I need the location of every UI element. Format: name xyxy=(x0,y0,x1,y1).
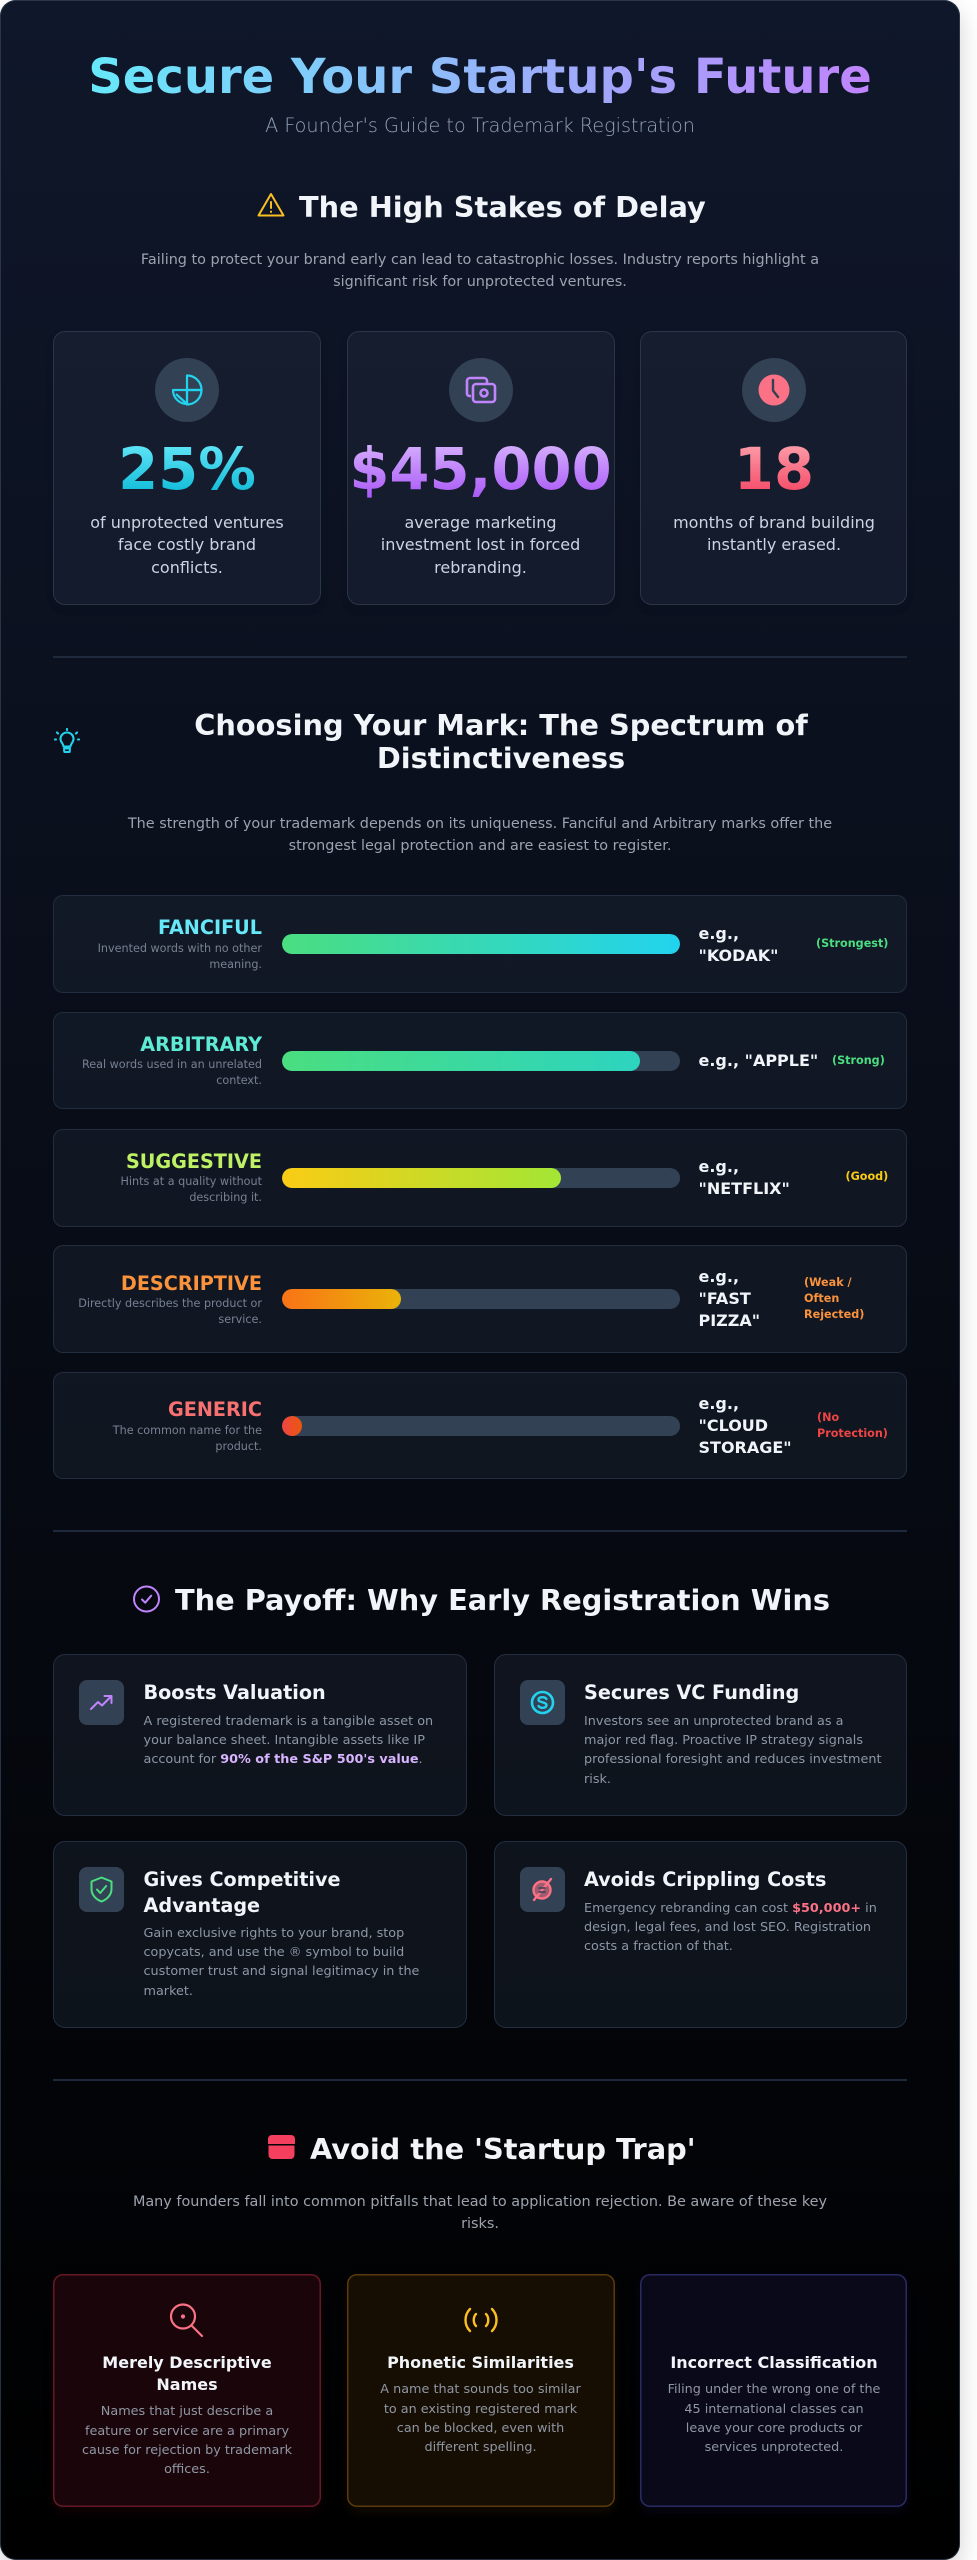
description xyxy=(121,1175,262,1204)
card text: can be blocked, even with xyxy=(397,2421,564,2436)
card text xyxy=(144,1714,433,1767)
stat label: rebranding. xyxy=(434,558,527,577)
card title: Names xyxy=(156,2375,218,2394)
heading text: Avoid the 'Startup Trap' xyxy=(310,2132,696,2166)
card title xyxy=(102,2352,272,2394)
description: meaning. xyxy=(209,958,262,971)
section heading: spectrum xyxy=(54,708,808,774)
card title: Phonetic Similarities xyxy=(387,2352,574,2372)
example: e.g., "APPLE" xyxy=(698,1051,818,1070)
card text xyxy=(82,2404,292,2477)
strength note: Rejected) xyxy=(804,1308,864,1321)
icon: shield check xyxy=(79,1867,124,1912)
trap paragraph xyxy=(133,2194,827,2232)
icon: sound waves xyxy=(464,2308,498,2332)
example: e.g., xyxy=(698,1157,739,1176)
strength bar xyxy=(282,1168,680,1188)
card text: customer trust and signal legitimacy in the xyxy=(144,1964,419,1979)
example xyxy=(698,924,779,965)
icon: trap xyxy=(268,2135,295,2159)
card title xyxy=(144,1868,340,1917)
panel: suggestive row xyxy=(53,1129,907,1227)
panel: descriptive row xyxy=(53,1245,907,1353)
label: ARBITRARY xyxy=(140,1033,262,1056)
strength bar xyxy=(282,1289,680,1309)
stat number: 25% xyxy=(118,436,256,503)
card text: different spelling. xyxy=(424,2440,537,2455)
strength note: Protection) xyxy=(817,1427,888,1440)
example xyxy=(698,1267,760,1330)
card text: services unprotected. xyxy=(705,2440,843,2455)
strength note: (Strongest) xyxy=(816,937,888,950)
icon: check circle xyxy=(133,1586,160,1612)
icon: light bulb xyxy=(54,728,80,753)
card text: 45 international classes can xyxy=(684,2402,864,2417)
section heading: payoff xyxy=(133,1583,830,1617)
card text: offices. xyxy=(164,2462,210,2477)
card text: Investors see an unprotected brand as a xyxy=(584,1714,843,1729)
description: product. xyxy=(215,1440,262,1453)
strength bar xyxy=(282,1416,680,1436)
strength note: Often xyxy=(804,1292,839,1305)
section heading: startup trap xyxy=(268,2132,696,2166)
icon: dollar coin xyxy=(520,1680,564,1725)
card text: account for 90% of the S&P 500's value. xyxy=(144,1752,423,1767)
card title: Advantage xyxy=(144,1894,260,1917)
card title: Avoids Crippling Costs xyxy=(584,1868,826,1891)
panel: incorrect classification xyxy=(640,2274,907,2507)
card text xyxy=(584,1714,882,1787)
subtitle: A Founder's Guide to Trademark Registration xyxy=(265,114,695,137)
example: e.g., xyxy=(698,924,739,943)
panel: stat 18 xyxy=(640,331,907,605)
description: service. xyxy=(218,1313,262,1326)
stat label: average marketing xyxy=(404,513,557,532)
card text xyxy=(380,2382,581,2455)
stat label: conflicts. xyxy=(151,558,223,577)
heading text: Choosing Your Mark: The Spectrum of xyxy=(194,708,808,742)
description xyxy=(78,1297,262,1326)
panel: merely descriptive xyxy=(53,2274,321,2507)
card text: copycats, and use the ® symbol to build xyxy=(144,1945,404,1960)
icon: list lines xyxy=(760,2308,789,2332)
stat label: instantly erased. xyxy=(707,535,841,554)
icon: pie chart xyxy=(155,358,219,422)
stat label: of unprotected ventures xyxy=(90,513,284,532)
stat number: 18 xyxy=(734,436,814,503)
example: e.g., xyxy=(698,1394,739,1413)
description xyxy=(82,1058,262,1087)
strength note: (Strong) xyxy=(832,1054,885,1067)
spectrum paragraph: The strength of your trademark depends on its uniqueness. Fanciful and Arbitrary marks offer the xyxy=(128,816,832,832)
stat label: months of brand building xyxy=(673,513,875,532)
stat label xyxy=(381,513,580,577)
panel: avoids crippling costs xyxy=(494,1841,907,2028)
description: describing it. xyxy=(189,1191,262,1204)
panel: fanciful row xyxy=(53,895,907,993)
example: "CLOUD xyxy=(698,1416,768,1435)
label: DESCRIPTIVE xyxy=(121,1272,262,1295)
label: FANCIFUL xyxy=(158,916,262,939)
example xyxy=(698,1157,790,1198)
card text: A registered trademark is a tangible asset on xyxy=(144,1714,433,1729)
card text: market. xyxy=(144,1984,193,1999)
card title: Secures VC Funding xyxy=(584,1681,799,1704)
icon: money xyxy=(448,358,512,422)
card text: leave your core products or xyxy=(686,2421,862,2436)
card text: A name that sounds too similar xyxy=(380,2382,581,2397)
icon: trending up xyxy=(79,1680,124,1725)
title: Secure Your Startup's Future xyxy=(88,49,872,105)
card text: risk. xyxy=(584,1772,611,1787)
card title: Boosts Valuation xyxy=(144,1681,326,1704)
description: The common name for the xyxy=(113,1424,262,1437)
example: "KODAK" xyxy=(698,946,779,965)
stat label xyxy=(673,513,875,554)
heading text: The Payoff: Why Early Registration Wins xyxy=(175,1583,830,1617)
panel: generic row xyxy=(53,1372,907,1479)
panel: stat 25% xyxy=(53,331,321,605)
icon: magnifier xyxy=(170,2303,204,2337)
description xyxy=(98,942,262,971)
card text: major red flag. Proactive IP strategy signals xyxy=(584,1733,863,1748)
card text: Filing under the wrong one of the xyxy=(668,2382,880,2397)
heading text: Distinctiveness xyxy=(377,740,625,774)
card text xyxy=(640,2380,908,2457)
stat label: face costly brand xyxy=(118,535,256,554)
strength note xyxy=(804,1276,864,1321)
intro paragraph xyxy=(141,252,819,290)
trap paragraph: Many founders fall into common pitfalls that lead to application rejection. Be aware of these key xyxy=(133,2194,827,2210)
heading text xyxy=(194,708,808,774)
example: PIZZA" xyxy=(698,1311,760,1330)
card text: cause for rejection by trademark xyxy=(82,2443,292,2458)
intro paragraph: significant risk for unprotected ventures. xyxy=(333,274,627,290)
label: GENERIC xyxy=(168,1398,262,1421)
description: Directly describes the product or xyxy=(78,1297,262,1310)
example: "FAST xyxy=(698,1289,751,1308)
example: e.g., xyxy=(698,1267,739,1286)
panel: secures vc funding xyxy=(494,1654,907,1816)
trap paragraph: risks. xyxy=(461,2216,499,2232)
section heading: high stakes xyxy=(258,190,706,224)
panel: phonetic similarities xyxy=(346,2274,614,2507)
stat label xyxy=(90,513,284,577)
card title: Merely Descriptive xyxy=(102,2352,272,2372)
card title: Incorrect Classification xyxy=(670,2352,878,2372)
icon: clock xyxy=(742,358,806,422)
example xyxy=(698,1394,792,1457)
example: "NETFLIX" xyxy=(698,1179,790,1198)
card text: feature or service are a primary xyxy=(85,2424,289,2439)
card text: professional foresight and reduces investment xyxy=(584,1752,881,1767)
description: Hints at a quality without xyxy=(121,1175,262,1188)
card text: Names that just describe a xyxy=(101,2404,273,2419)
panel: arbitrary row xyxy=(53,1012,907,1109)
card text: costs a fraction of that. xyxy=(584,1939,733,1954)
strength note: (Weak / xyxy=(804,1276,852,1289)
panel: boosts valuation xyxy=(53,1654,467,1816)
card text: your balance sheet. Intangible assets like IP xyxy=(144,1733,425,1748)
strength bar xyxy=(282,934,680,954)
intro paragraph: Failing to protect your brand early can lead to catastrophic losses. Industry reports highlight a xyxy=(141,252,819,268)
example: STORAGE" xyxy=(698,1438,792,1457)
icon: crossed dollar xyxy=(520,1867,564,1912)
description: context. xyxy=(216,1074,262,1087)
icon: warning triangle xyxy=(258,193,284,216)
label: SUGGESTIVE xyxy=(126,1150,262,1173)
card text: Gain exclusive rights to your brand, stop xyxy=(144,1926,404,1941)
description xyxy=(112,1424,262,1453)
card title: Gives Competitive xyxy=(144,1868,340,1891)
description: Invented words with no other xyxy=(98,942,262,955)
description: Real words used in an unrelated xyxy=(82,1058,262,1071)
panel: stat $45,000 xyxy=(346,331,614,605)
heading text: The High Stakes of Delay xyxy=(299,190,706,224)
spectrum paragraph: strongest legal protection and are easiest to register. xyxy=(289,838,671,854)
card text xyxy=(584,1901,877,1954)
strength note: (No xyxy=(817,1411,839,1424)
strength note xyxy=(817,1411,888,1440)
panel: competitive advantage xyxy=(53,1841,467,2028)
card text: to an existing registered mark xyxy=(384,2402,577,2417)
card text: design, legal fees, and lost SEO. Registration xyxy=(584,1920,871,1935)
strength note: (Good) xyxy=(846,1170,888,1183)
card text: Emergency rebranding can cost $50,000+ in xyxy=(584,1901,877,1916)
strength bar xyxy=(282,1051,680,1071)
stat label: investment lost in forced xyxy=(381,535,580,554)
stat number: $45,000 xyxy=(349,436,612,503)
card text xyxy=(144,1926,419,1999)
spectrum paragraph xyxy=(128,816,832,854)
